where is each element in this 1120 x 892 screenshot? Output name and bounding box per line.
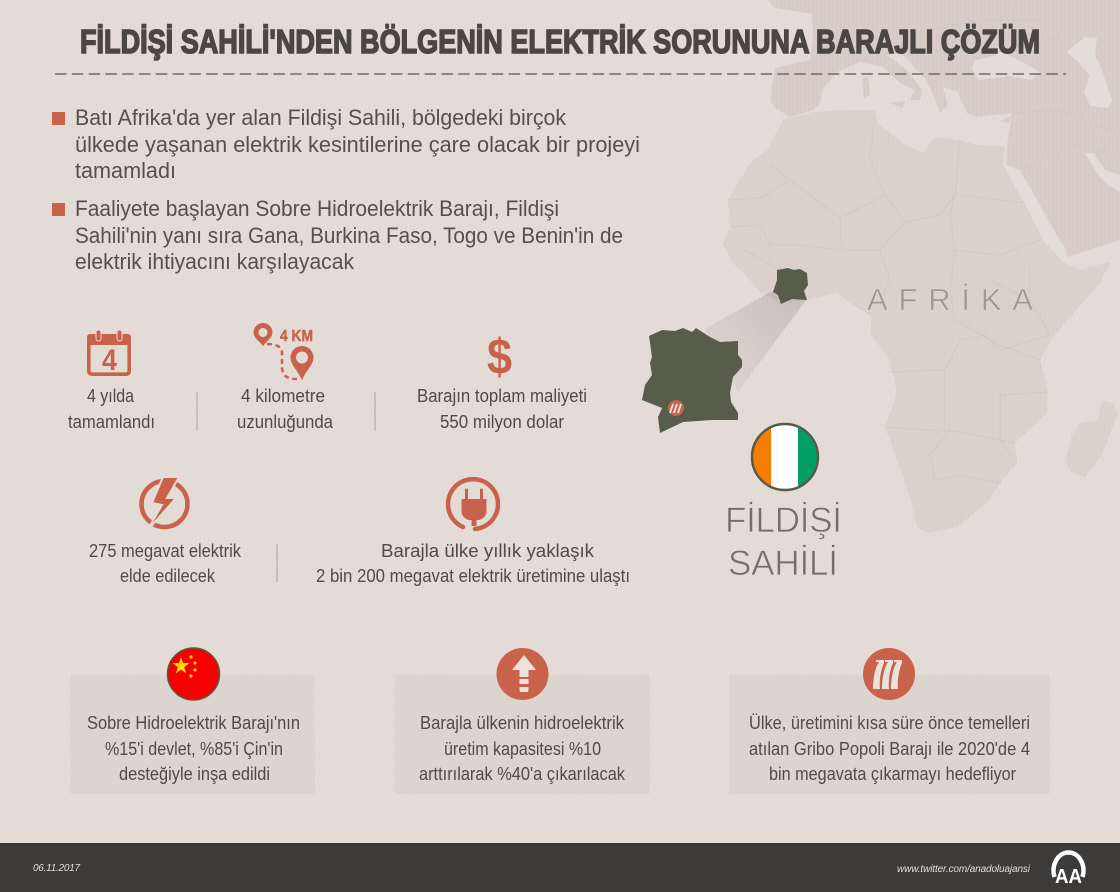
Eurasia landmass <box>768 0 1120 257</box>
icon: dam <box>863 648 915 700</box>
panel: capacity <box>395 648 650 794</box>
bullet text 2 <box>52 196 623 274</box>
panel: China funding: desteğiyle inşa edildi <box>119 763 270 784</box>
label: country name: FİLDİŞİ <box>725 501 842 540</box>
borders <box>728 0 1120 483</box>
icon: calendar: 4 <box>102 344 117 377</box>
label: 2200 MW <box>316 540 630 586</box>
label: cost: 550 milyon dolar <box>440 411 564 432</box>
panel: capacity: arttırılarak %40'a çıkarılacak <box>419 763 626 784</box>
Caspian Sea <box>1067 37 1112 108</box>
label: AFRIKA: AFRİKA <box>867 282 1033 317</box>
label: 4 km: uzunluğunda <box>237 411 334 432</box>
panel: capacity: üretim kapasitesi %10 <box>444 738 601 759</box>
icon: China flag <box>168 648 220 700</box>
label: 4 km: 4 kilometre <box>241 385 325 406</box>
panel: China funding <box>70 648 315 794</box>
title divider <box>55 73 1066 75</box>
Red Sea highlight <box>1008 167 1067 262</box>
Africa landmass <box>723 110 1110 533</box>
website: www.twitter.com/anadoluajansi <box>897 864 1031 875</box>
icon: plug <box>448 479 498 529</box>
bullet text 2: Faaliyete başlayan Sobre Hidroelektrik Barajı, Fildişi <box>75 196 559 221</box>
panel: China funding: Sobre Hidroelektrik Barajı'nın <box>87 712 300 733</box>
locator cone <box>705 291 806 392</box>
label: 4 years <box>68 385 155 432</box>
icon: route with pins <box>254 323 314 380</box>
seas <box>972 37 1120 262</box>
Ivory Coast small map <box>773 268 808 304</box>
panel: China funding: %15'i devlet, %85'i Çin'in <box>105 738 283 759</box>
label: 275 MW <box>89 540 242 586</box>
islands <box>862 76 1012 123</box>
Persian Gulf <box>1085 153 1120 192</box>
logo: AA <box>1054 853 1083 888</box>
label: 275 MW: elde edilecek <box>120 565 216 586</box>
panel: target: bin megavata çıkarmayı hedefliyor <box>769 763 1016 784</box>
bullet text 2: Sahili'nin yanı sıra Gana, Burkina Faso, Togo ve Benin'in de <box>75 223 623 248</box>
label: 4 years: tamamlandı <box>68 411 155 432</box>
panel: target: atılan Gribo Popoli Barajı ile 2020'de 4 <box>749 738 1030 759</box>
label: country name: SAHİLİ <box>728 544 838 583</box>
label: cost <box>417 385 587 432</box>
icon: dollar: $ <box>487 329 512 385</box>
date: 06.11.2017 <box>33 863 80 874</box>
icon: dam location <box>668 400 684 416</box>
panel: capacity: Barajla ülkenin hidroelektrik <box>420 712 625 733</box>
bullet text 1: tamamladı <box>75 158 176 183</box>
label: 2200 MW: Barajla ülke yıllık yaklaşık <box>381 540 595 561</box>
label: cost: Barajın toplam maliyeti <box>417 385 587 406</box>
flag: Ivory Coast <box>750 420 820 494</box>
label: 275 MW: 275 megavat elektrik <box>89 540 242 561</box>
Black Sea <box>972 52 1040 80</box>
logo: AA: AA <box>1055 866 1082 888</box>
panel: target: Ülke, üretimini kısa süre önce temelleri <box>749 712 1030 733</box>
label: country name <box>725 501 842 583</box>
icon: lightning <box>142 477 188 531</box>
label: 4 years: 4 yılda <box>87 385 135 406</box>
icon: route with pins: 4 KM <box>280 328 313 345</box>
icon: up arrow <box>496 648 548 700</box>
Ivory Coast large map <box>642 328 742 433</box>
Madagascar <box>1066 400 1118 477</box>
bullet text 1 <box>52 105 640 183</box>
map: Africa and Eurasia <box>723 0 1120 533</box>
bullet text 2: elektrik ihtiyacını karşılayacak <box>75 249 355 274</box>
panel: target <box>729 648 1050 794</box>
footer bar <box>0 843 1120 892</box>
label: 4 km <box>237 385 334 432</box>
bullet text 1: ülkede yaşanan elektrik kesintilerine çare olacak bir projeyi <box>75 132 640 157</box>
bullet text 1: Batı Afrika'da yer alan Fildişi Sahili, bölgedeki birçok <box>75 105 567 130</box>
icon: calendar <box>87 330 131 377</box>
label: 2200 MW: 2 bin 200 megavat elektrik üretimine ulaştı <box>316 565 630 586</box>
